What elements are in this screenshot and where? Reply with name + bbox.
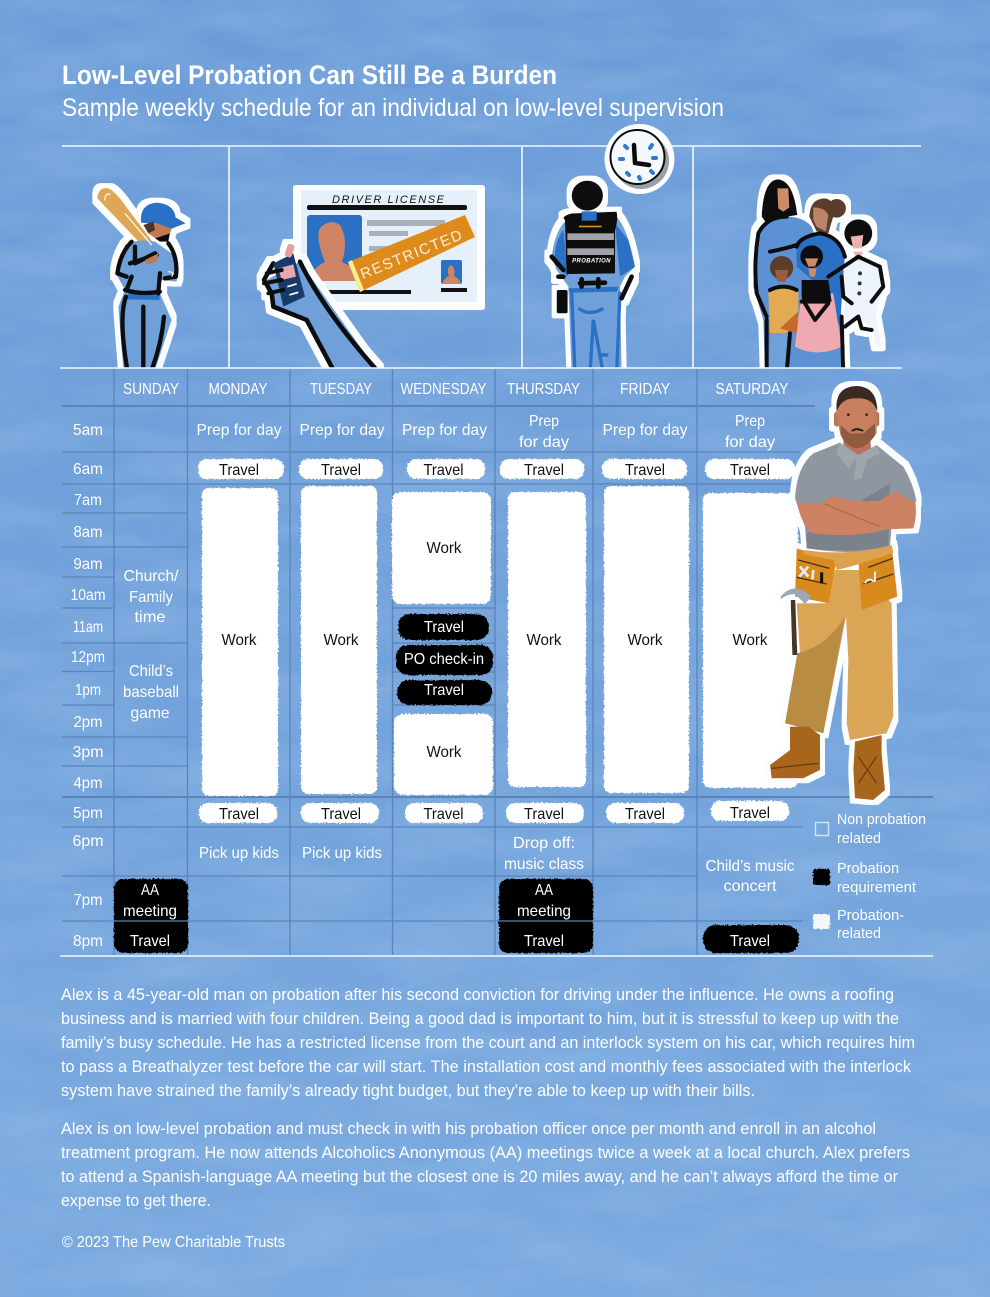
day headers: THURSDAY [507,381,580,398]
schedule entries: white on blue: Pick up kids [199,845,279,862]
day headers [123,381,789,398]
time labels: 6am [73,461,103,478]
schedule white blocks [198,459,798,823]
schedule entries: white on blue: Prep for day [602,422,688,439]
illustration: Alex, the roofer [770,386,917,800]
schedule entries: white on blue: time [134,609,166,626]
schedule entries: white on blue: Prep [735,413,765,430]
schedule entries: white on blue: for day [519,434,569,451]
schedule black blocks [114,614,799,953]
illustration: probation officer [552,181,635,373]
schedule entries: white on black [123,619,770,950]
illustration: baseball player [97,188,186,370]
schedule entries: white on blue: Family [129,589,173,606]
narrative paragraph 2: Alex is on low-level probation and must check in with his probation officer once per month and enroll in an alcohol [61,1120,876,1138]
day headers: SUNDAY [123,381,179,398]
schedule entries: white on blue: Prep for day [402,422,487,439]
schedule entries: black on white: Work [526,632,562,649]
subtitle: Sample weekly schedule for an individual on low-level supervision [62,94,724,122]
schedule entries: black on white: Work [222,632,257,649]
schedule entries: black on white: Travel [219,806,259,823]
time labels: 8am [74,524,102,541]
schedule entries: white on black: Travel [424,619,464,636]
illustration: restricted driver license [293,185,485,310]
legend: requirement [837,880,916,896]
schedule entries: black on white: Travel [625,806,665,823]
schedule entries: white on blue [123,413,794,895]
schedule entries: white on blue: Prep for day [196,422,282,439]
vest label: PROBATION [572,258,611,264]
schedule entries: white on blue: Church/ [124,568,179,585]
legend: Non probation [837,812,926,828]
schedule entries: white on blue: baseball [123,684,179,701]
time labels: 3pm [72,744,104,761]
schedule entries: white on blue: Prep for day [300,422,384,439]
schedule entries: white on blue: Drop off: [513,835,575,852]
narrative paragraph 2: expense to get there. [61,1192,211,1210]
illustrations above the schedule [97,124,883,373]
time labels: 2pm [74,714,102,731]
narrative paragraph 2: treatment program. He now attends Alcoholics Anonymous (AA) meetings twice a week at a local church. Alex prefers [61,1144,910,1162]
schedule entries: white on blue: Child’s [129,663,173,680]
schedule entries: black on white: Travel [219,462,259,479]
legend: Probation- [837,908,904,924]
illustration: clock [604,124,674,194]
schedule entries: black on white: Travel [625,462,665,479]
time labels: 8pm [73,933,103,950]
schedule entries: black on white: Travel [730,805,770,822]
narrative paragraph 1: business and is married with four children. Being a good dad is important to him, but it is stressful to keep up with the [61,1010,899,1028]
schedule entries: white on blue: music class [504,856,584,873]
time labels: 7am [74,492,102,509]
legend: Probation [837,861,899,877]
schedule entries: black on white: Travel [730,462,770,479]
license heading: DRIVER LICENSE [332,194,445,206]
narrative paragraph 1: Alex is a 45-year-old man on probation after his second conviction for driving under the influence. He owns a roofing [61,986,894,1004]
time labels: 12pm [71,649,105,666]
copyright: © 2023 The Pew Charitable Trusts [62,1234,285,1251]
time labels: 11am [73,619,103,636]
schedule entries: black on white: Travel [321,462,361,479]
schedule entries: black on white [219,462,770,823]
schedule entries: black on white: Work [732,632,768,649]
schedule entries: black on white: Work [426,744,462,761]
schedule entries: black on white: Work [324,632,359,649]
schedule entries: white on black: meeting [123,903,177,920]
schedule entries: white on blue: Pick up kids [302,845,382,862]
schedule entries: white on black: AA [535,882,553,899]
time labels [70,422,106,950]
day headers: FRIDAY [620,381,670,398]
illustration: hand holding interlock device [264,243,377,370]
schedule entries: white on blue: game [130,705,170,722]
schedule entries: black on white: Travel [424,806,464,823]
time labels: 6pm [72,833,104,850]
illustration: family [753,179,883,373]
schedule entries: black on white: Travel [524,462,564,479]
narrative paragraph 2 [61,1120,910,1210]
day headers: TUESDAY [310,381,372,398]
time labels: 9am [74,556,102,573]
schedule entries: white on black: PO check-in [404,651,484,668]
stamp text: RESTRICTED [358,227,465,283]
schedule entries: white on black: Travel [730,933,770,950]
time labels: 10am [70,587,106,604]
day headers: SATURDAY [716,381,789,398]
schedule entries: white on blue: Prep [529,413,559,430]
schedule entries: black on white: Work [628,632,663,649]
narrative paragraph 1 [61,986,915,1100]
legend: related [837,926,881,942]
schedule entries: white on black: Travel [424,682,464,699]
day headers: MONDAY [208,381,268,398]
schedule entries: black on white: Work [426,540,462,557]
time labels: 7pm [74,892,102,909]
schedule entries: white on black: Travel [130,933,170,950]
narrative paragraph 1: family’s busy schedule. He has a restricted license from the court and an interlock system on his car, which requires him [61,1034,915,1052]
schedule entries: white on black: AA [141,882,159,899]
schedule entries: white on black: meeting [517,903,571,920]
schedule entries: white on blue: concert [724,878,777,895]
schedule entries: white on blue: Child’s music [706,858,794,875]
schedule entries: white on blue: for day [725,434,775,451]
day headers: WEDNESDAY [400,381,487,398]
title: Low-Level Probation Can Still Be a Burden [62,60,557,90]
schedule entries: black on white: Travel [524,806,564,823]
time labels: 5am [73,422,103,439]
narrative paragraph 2: to attend a Spanish-language AA meeting but the closest one is 20 miles away, and he can’t always afford the time or [61,1168,898,1186]
narrative paragraph 1: to pass a Breathalyzer test before the car will start. The installation cost and monthly fees associated with the interlock [61,1058,912,1076]
legend: related [837,831,881,847]
legend [813,812,926,942]
schedule entries: white on black: Travel [524,933,564,950]
time labels: 5pm [73,805,103,822]
time labels: 4pm [74,775,102,792]
narrative paragraph 1: system have strained the family’s already tight budget, but they’re able to keep up with their bills. [61,1082,755,1100]
time labels: 1pm [75,682,101,699]
schedule entries: black on white: Travel [424,462,464,479]
schedule entries: black on white: Travel [321,806,361,823]
